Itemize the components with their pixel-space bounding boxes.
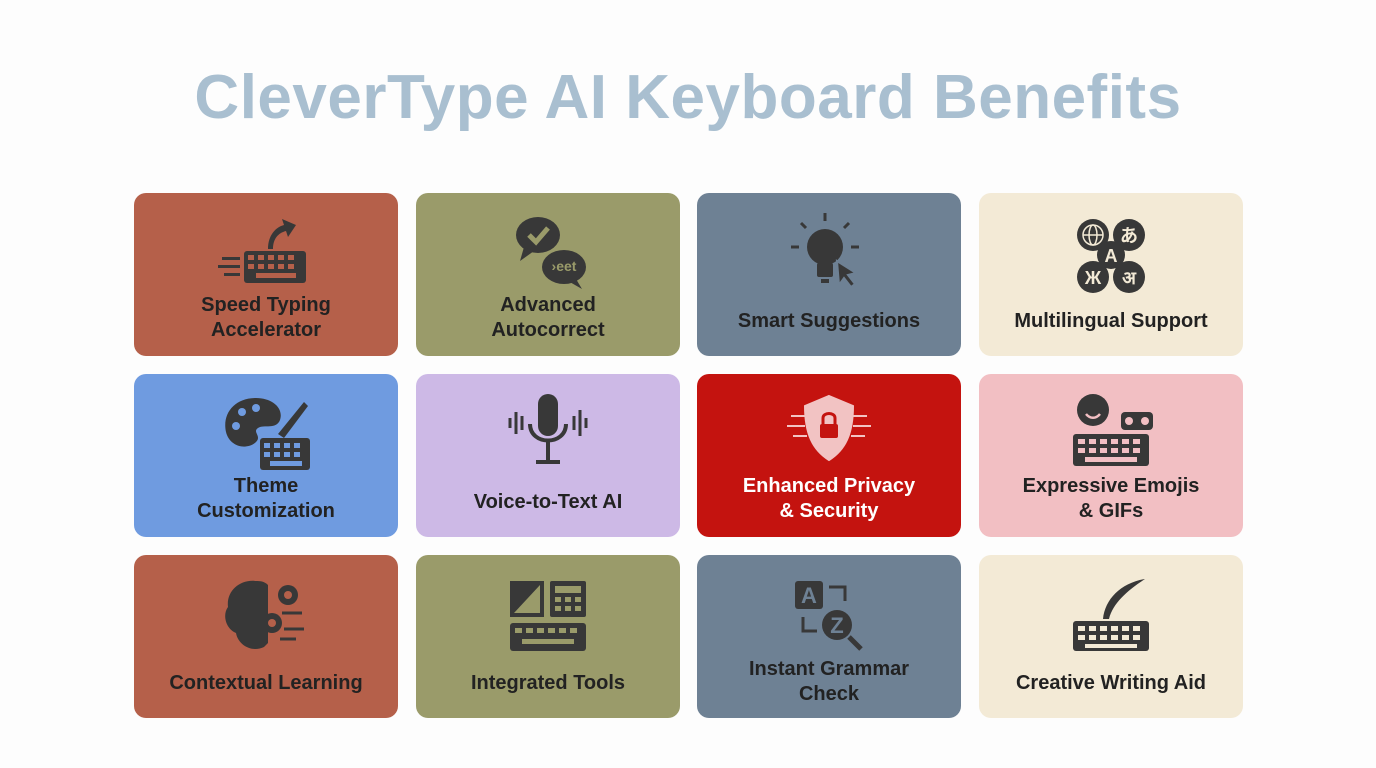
label: & GIFs <box>1079 500 1143 522</box>
label <box>749 658 909 705</box>
label: Multilingual Support <box>1014 310 1208 332</box>
card: autocorrect <box>416 193 680 356</box>
label: Theme <box>234 475 298 497</box>
title: CleverType AI Keyboard Benefits <box>194 63 1182 132</box>
label: Creative Writing Aid <box>1016 672 1206 694</box>
card: contextual learning <box>134 555 398 718</box>
label: Smart Suggestions <box>738 310 920 332</box>
icon: language circles: A <box>1104 246 1118 266</box>
icon: language circles: あ <box>1120 226 1138 246</box>
icon: keyboard with arrow <box>218 219 306 283</box>
label: Enhanced Privacy <box>743 475 915 497</box>
label: Accelerator <box>211 319 321 341</box>
label: & Security <box>780 500 878 522</box>
icon: emoji keyboard <box>1073 394 1153 466</box>
label: Integrated Tools <box>471 672 625 694</box>
card: creative writing <box>979 555 1243 718</box>
label: Contextual Learning <box>169 672 363 694</box>
label: Advanced <box>500 294 596 316</box>
icon: brain and gears <box>225 580 304 649</box>
icon: language circles: Ж <box>1084 268 1102 288</box>
icon: lightbulb <box>791 213 859 286</box>
label <box>491 294 605 341</box>
icon: A-Z magnifier: Z <box>830 613 844 638</box>
card: voice <box>416 374 680 537</box>
card: emojis <box>979 374 1243 537</box>
label: Speed Typing <box>201 294 331 316</box>
label <box>201 294 331 341</box>
icon: microphone <box>508 394 588 464</box>
card: integrated tools <box>416 555 680 718</box>
label <box>1023 475 1199 522</box>
card: privacy <box>697 374 961 537</box>
icon: palette and keyboard <box>225 398 310 470</box>
label <box>197 475 335 522</box>
card: grammar check <box>697 555 961 718</box>
card: multilingual <box>979 193 1243 356</box>
icon: calculator and keyboard <box>510 581 586 651</box>
label: Autocorrect <box>491 319 605 341</box>
label: Instant Grammar <box>749 658 909 680</box>
label: Expressive Emojis <box>1023 475 1199 497</box>
label: Customization <box>197 500 335 522</box>
icon: A-Z magnifier: A <box>801 583 817 608</box>
label <box>743 475 915 522</box>
card: speed typing <box>134 193 398 356</box>
icon: chat bubbles: ›eet <box>552 258 577 274</box>
label: Check <box>799 683 859 705</box>
icon: shield lock <box>787 394 871 462</box>
icon: A-Z magnifier <box>795 581 863 651</box>
label: Voice-to-Text AI <box>474 491 622 513</box>
card: theme customization <box>134 374 398 537</box>
card: smart suggestions <box>697 193 961 356</box>
icon: language circles <box>1077 219 1145 293</box>
icon: chat bubbles <box>516 217 586 289</box>
icon: language circles: अ <box>1122 268 1137 288</box>
icon: quill and keyboard <box>1073 579 1149 651</box>
